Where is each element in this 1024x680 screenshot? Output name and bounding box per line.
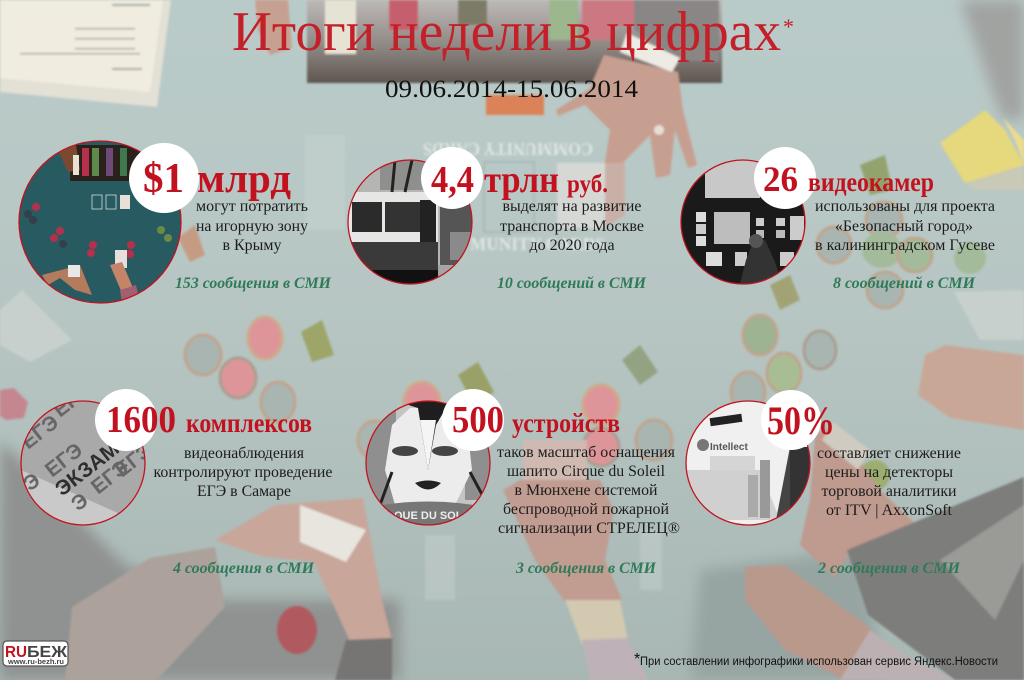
headline unit: трлн — [484, 159, 559, 201]
description: в Мюнхене системой — [514, 482, 658, 499]
media mentions: 8 сообщений в СМИ — [833, 275, 976, 292]
photo: Intellect software box: Intellect — [710, 442, 748, 453]
date range: 09.06.2014-15.06.2014 — [385, 76, 639, 103]
photo ring — [686, 401, 810, 525]
headline number: 500 — [452, 399, 504, 441]
photo: exam paper: ЕГЭ — [17, 411, 63, 454]
photo: exam paper: Э — [19, 469, 45, 496]
media mentions: 2 сообщения в СМИ — [817, 560, 961, 577]
headline unit: устройств — [512, 408, 620, 438]
headline unit: видеокамер — [808, 167, 934, 197]
media mentions: 10 сообщений в СМИ — [497, 275, 647, 292]
logo: RUBEZH: БЕЖ — [27, 644, 68, 661]
footnote: * — [634, 651, 640, 668]
media mentions: 3 сообщения в СМИ — [515, 560, 657, 577]
photo: control room — [681, 160, 806, 284]
description: могут потратить — [196, 198, 308, 215]
description: шапито Cirque du Soleil — [507, 463, 666, 480]
description: «Безопасный город» — [835, 218, 973, 235]
description: до 2020 года — [529, 237, 615, 254]
description: торговой аналитики — [822, 483, 957, 500]
logo: RUBEZH: www.ru-bezh.ru — [7, 659, 64, 666]
description — [817, 445, 961, 519]
photo: exam paper: ЕГЭ — [49, 379, 95, 422]
footnote — [634, 651, 998, 668]
photo ring — [348, 160, 472, 284]
headline percent: 50% — [767, 398, 835, 443]
headline unit: млрд — [197, 155, 291, 201]
logo: RUBEZH: RU — [5, 644, 27, 661]
description: составляет снижение — [817, 445, 961, 462]
panel: 4.4 trillion rubles transport — [348, 147, 647, 292]
photo: exam paper: Э — [67, 489, 93, 516]
description: использованы для проекта — [815, 198, 995, 215]
photo ring — [19, 141, 181, 303]
description — [154, 445, 332, 500]
headline unit: комплексов — [186, 408, 312, 438]
footnote: При составлении инфографики использован сервис Яндекс.Новости — [640, 656, 998, 668]
photo ring — [21, 401, 145, 525]
logo: RUBEZH — [3, 641, 68, 666]
photo: Cirque du Soleil performer: QUE DU SOL — [394, 510, 463, 522]
description: в калининградском Гусеве — [815, 237, 995, 254]
photo ring — [681, 160, 805, 284]
description: в Крыму — [222, 237, 282, 254]
description: контролируют проведение — [154, 464, 332, 481]
media mentions: 153 сообщения в СМИ — [175, 275, 332, 292]
photo: exam paper — [22, 402, 144, 524]
number badge — [129, 143, 199, 213]
photo: exam paper: ЕГЭ — [87, 456, 133, 499]
photo: exam paper: ЕГЭ — [111, 439, 157, 482]
description: от ITV | AxxonSoft — [826, 502, 953, 519]
panel: 500 devices — [366, 389, 680, 577]
background: faded casino table photo: COMMUNITY CARDS — [423, 139, 593, 159]
media mentions: 4 сообщения в СМИ — [172, 560, 315, 577]
description: беспроводной пожарной — [503, 501, 669, 518]
photo: trolleybus — [348, 160, 472, 285]
background: faded casino table photo: MUNITY CARDS — [470, 234, 605, 254]
description — [815, 198, 995, 254]
description: на игорную зону — [196, 218, 308, 235]
description: таков масштаб оснащения — [497, 444, 676, 461]
description: ЕГЭ в Самаре — [197, 483, 291, 500]
panel: 1600 surveillance systems — [17, 379, 333, 577]
description: выделят на развитие — [502, 198, 642, 215]
headline number: $1 — [143, 156, 184, 202]
number badge — [754, 147, 816, 209]
description: видеонаблюдения — [184, 445, 305, 462]
headline currency: руб. — [567, 171, 608, 198]
panel: $1 billion gambling zone — [19, 141, 332, 303]
number badge — [95, 389, 157, 451]
photo: Cirque du Soleil performer — [366, 401, 491, 525]
description — [497, 444, 680, 537]
photo: casino table — [19, 141, 181, 303]
number badge — [442, 389, 504, 451]
title: Итоги недели в цифрах — [232, 1, 781, 63]
description — [196, 198, 308, 254]
number badge — [761, 390, 821, 450]
description: цены на детекторы — [825, 464, 953, 481]
number badge — [421, 147, 483, 209]
headline number: 26 — [763, 159, 798, 199]
description — [500, 198, 644, 254]
photo: exam paper: ЭКЗАМ — [51, 437, 124, 501]
headline number: 1600 — [106, 399, 176, 441]
description: транспорта в Москве — [500, 218, 644, 235]
description: сигнализации СТРЕЛЕЦ® — [498, 520, 680, 537]
headline number: 4,4 — [431, 159, 474, 201]
panel: 50% price reduction — [686, 390, 961, 577]
photo ring — [366, 401, 490, 525]
photo: Intellect software box — [686, 401, 811, 525]
photo: exam paper: ЕГЭ — [41, 439, 87, 482]
panel: 26 video cameras — [681, 147, 995, 292]
title asterisk: * — [783, 14, 794, 39]
